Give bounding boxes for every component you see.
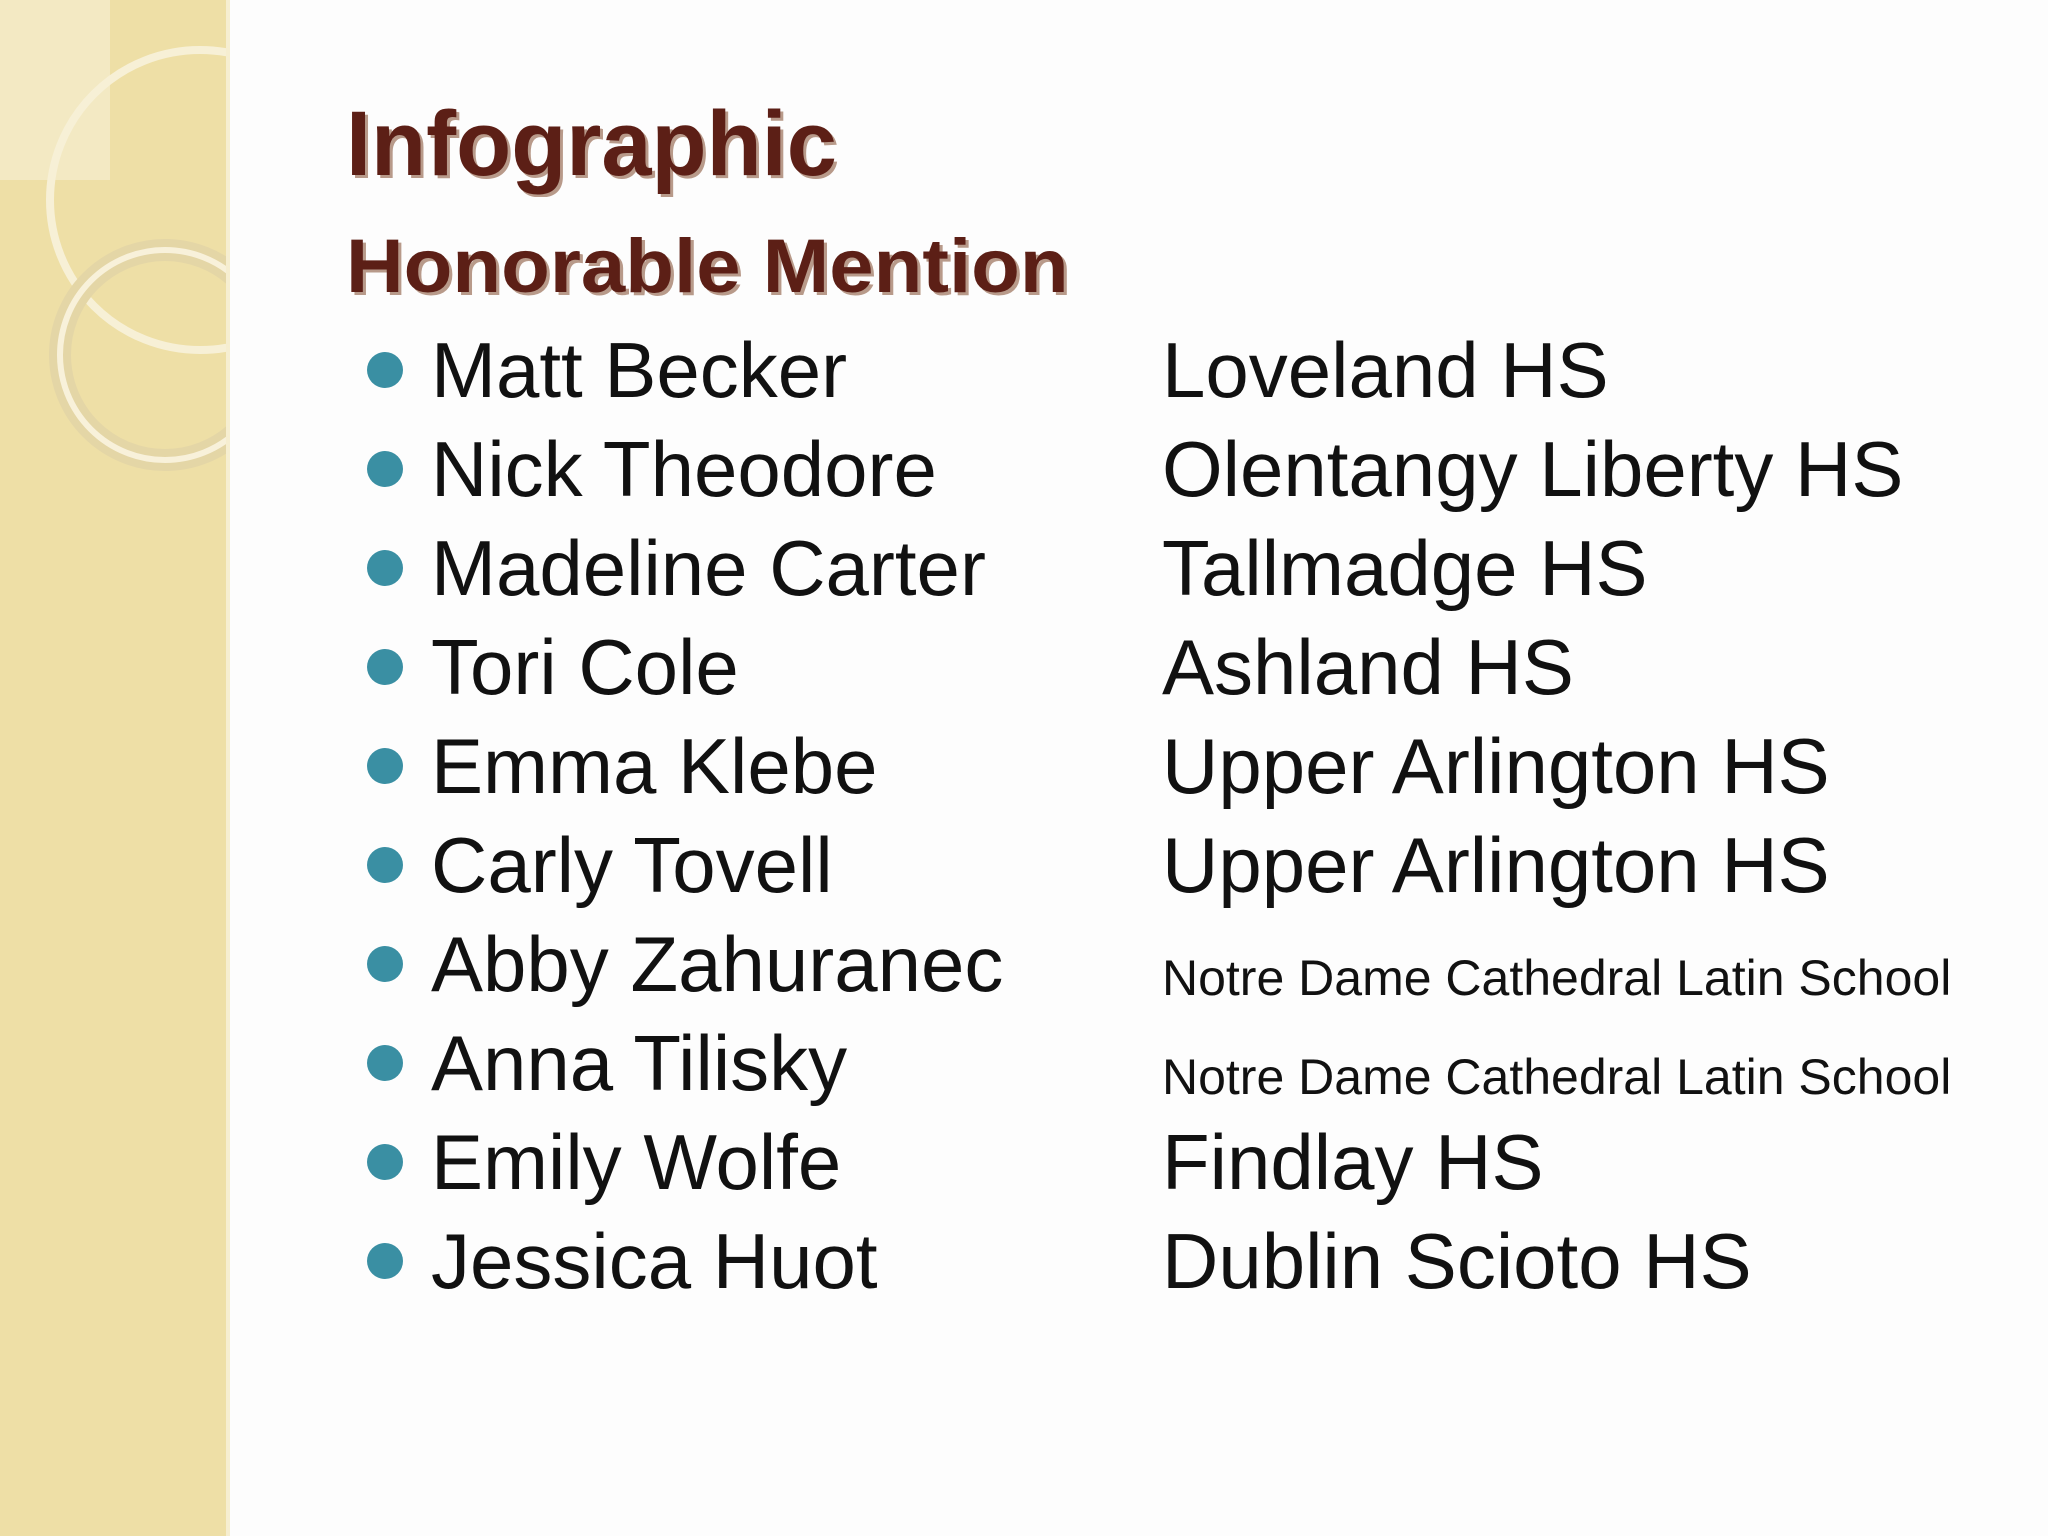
row 3: Madeline Carter — [431, 524, 986, 612]
row 10 — [367, 1217, 1752, 1305]
row 3 — [367, 524, 1648, 612]
row 10: Jessica Huot — [431, 1217, 878, 1305]
row 8 — [367, 1019, 1951, 1107]
row 2: Nick Theodore — [431, 425, 937, 513]
row 9 — [367, 1118, 1543, 1206]
row 10: Dublin Scioto HS — [1162, 1217, 1752, 1305]
row 4: Tori Cole — [431, 623, 739, 711]
row 4 — [367, 623, 1574, 711]
row 6 — [367, 821, 1830, 909]
row 9: Emily Wolfe — [431, 1118, 841, 1206]
row 1 — [367, 326, 1609, 414]
row 2: Olentangy Liberty HS — [1162, 425, 1903, 513]
title: Infographic — [346, 93, 837, 195]
row 4: Ashland HS — [1162, 623, 1574, 711]
row 2 — [367, 425, 1903, 513]
row 5: Emma Klebe — [431, 722, 878, 810]
sidebar — [0, 0, 230, 1536]
row 1: Matt Becker — [431, 326, 847, 414]
row 8: Anna Tilisky — [431, 1019, 847, 1107]
row 9: Findlay HS — [1162, 1118, 1543, 1206]
row 7: Notre Dame Cathedral Latin School — [1162, 950, 1951, 1006]
row 5 — [367, 722, 1830, 810]
row 3: Tallmadge HS — [1162, 524, 1648, 612]
row 7: Abby Zahuranec — [431, 920, 1003, 1008]
row 6: Upper Arlington HS — [1162, 821, 1830, 909]
row 7 — [367, 920, 1951, 1008]
row 8: Notre Dame Cathedral Latin School — [1162, 1049, 1951, 1105]
row 5: Upper Arlington HS — [1162, 722, 1830, 810]
row 1: Loveland HS — [1162, 326, 1609, 414]
row 6: Carly Tovell — [431, 821, 833, 909]
list of honorable mentions — [367, 326, 1951, 1305]
subtitle: Honorable Mention — [346, 224, 1069, 309]
